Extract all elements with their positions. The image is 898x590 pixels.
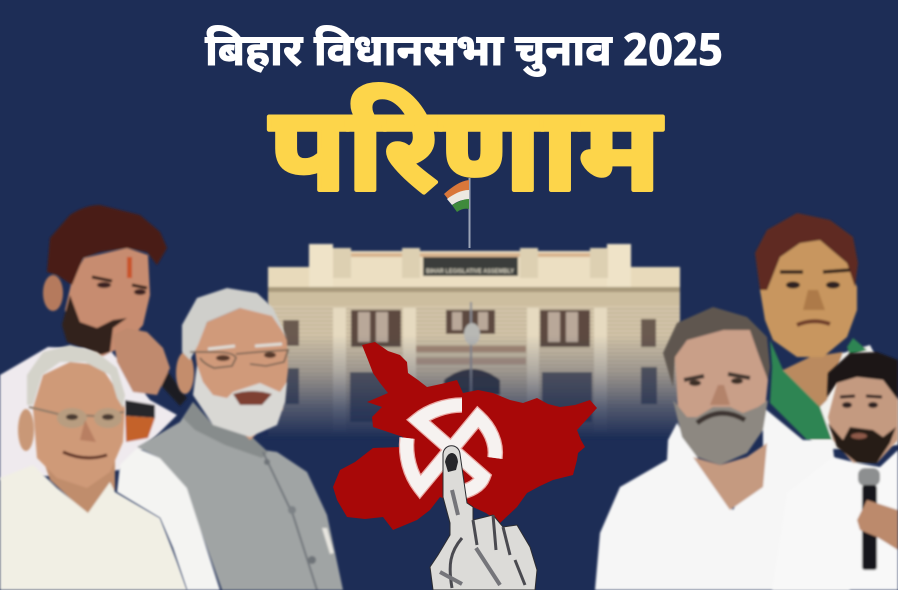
map: Bihar <box>333 342 597 530</box>
building: Bihar Legislative Assembly <box>262 244 686 438</box>
hand with microphone <box>113 328 187 442</box>
title: बिहार विधानसभा चुनाव 2025 <box>205 25 723 83</box>
portrait: left back man <box>0 205 187 480</box>
icon: flag <box>444 178 470 248</box>
icon: swastik election symbol <box>407 405 495 493</box>
portrait: far left man <box>0 345 187 590</box>
sign board: BIHAR LEGISLATIVE ASSEMBLY <box>426 269 514 275</box>
heading: result: परिणाम <box>269 83 663 239</box>
portrait: centre left man <box>117 288 343 590</box>
sign board <box>423 257 518 276</box>
portrait: far right man <box>772 352 898 590</box>
icon: voting finger hand <box>430 446 537 590</box>
portrait: centre right man <box>595 307 850 590</box>
hand with microphone <box>857 468 898 570</box>
portrait: right back man <box>755 213 898 450</box>
